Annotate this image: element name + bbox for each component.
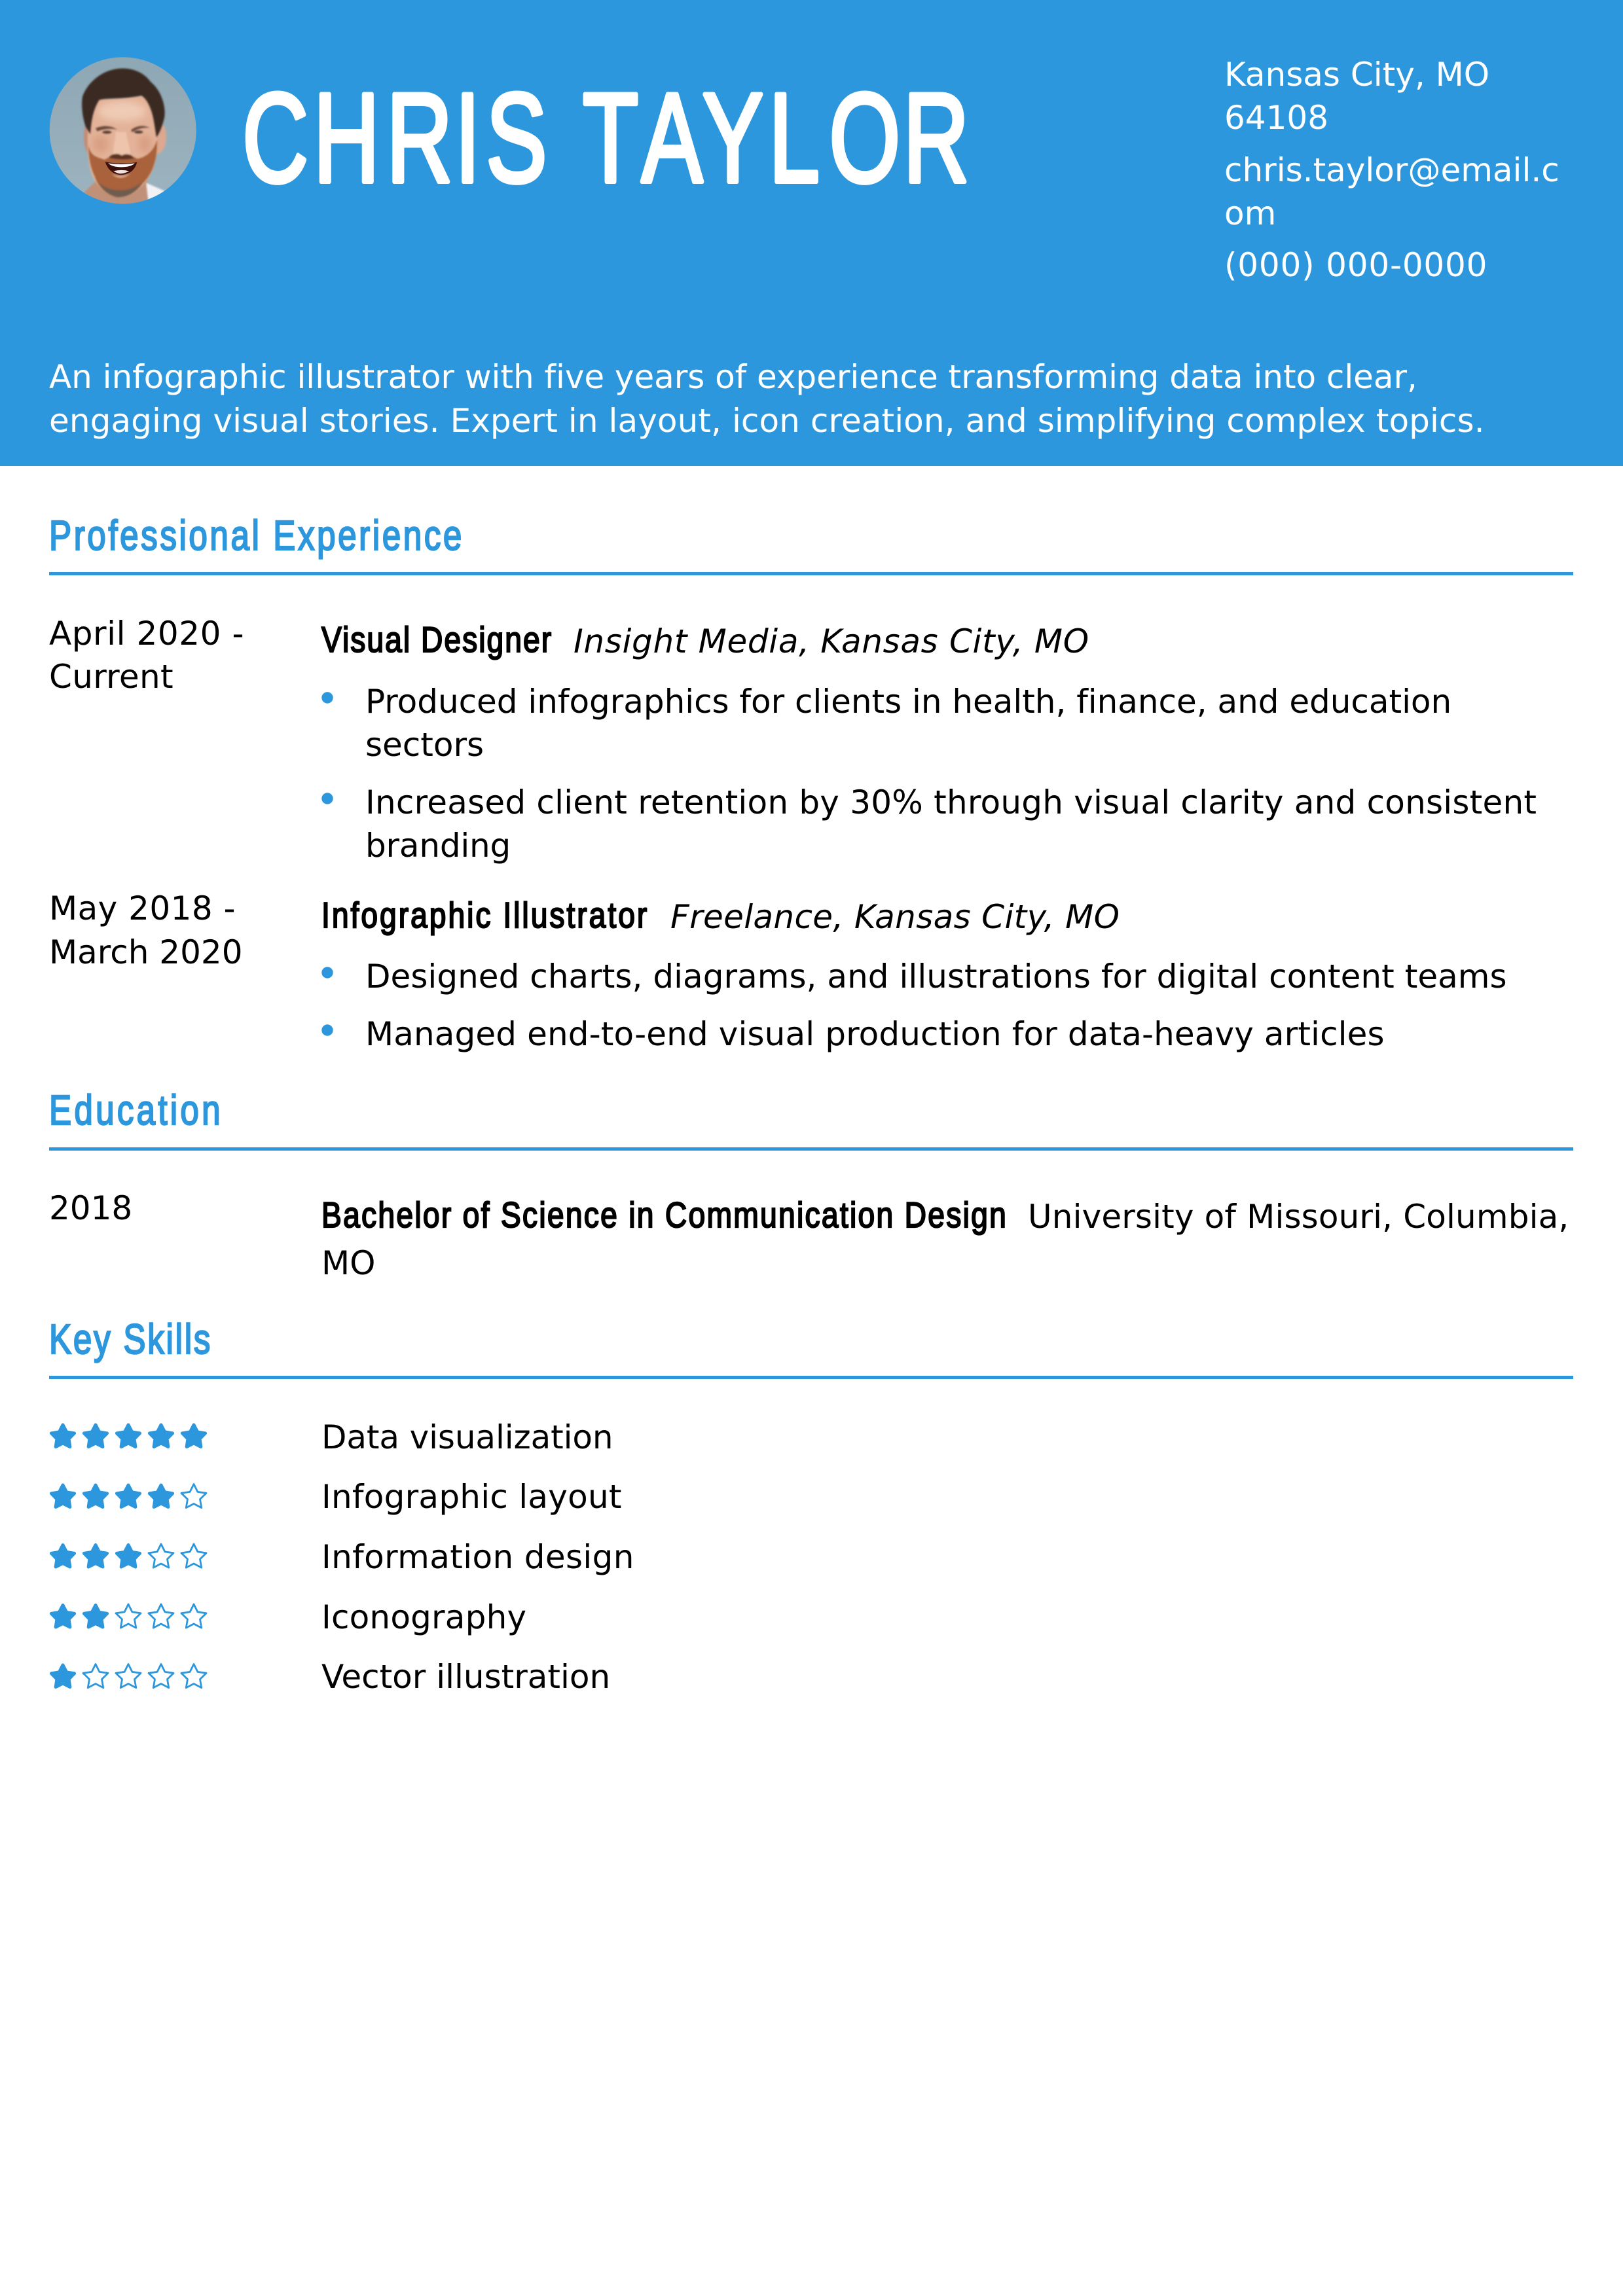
heading rule [49, 572, 1573, 575]
heading: key skills: Key Skills [49, 1317, 210, 1363]
heading rule [49, 1147, 1573, 1151]
skill row: iconography [51, 1598, 526, 1636]
date end: March 2020 [49, 933, 243, 971]
bullet text: Designed charts, diagrams, and illustrations for digital content teams [365, 958, 1507, 996]
address: Kansas City, MO [1224, 56, 1489, 94]
skill name: Information design [321, 1538, 634, 1576]
bullet text wrap: sectors [365, 726, 484, 764]
skill row: vector illustration [51, 1658, 610, 1696]
skill name: Data visualization [321, 1418, 613, 1456]
bullet dot [321, 1024, 333, 1036]
bullet text: Produced infographics for clients in health, finance, and education [365, 683, 1451, 721]
date end: Current [49, 658, 173, 696]
bullet dot [321, 967, 333, 978]
section: education [49, 1088, 1573, 1282]
skill name: Infographic layout [321, 1478, 622, 1516]
bullet text: Increased client retention by 30% through visual clarity and consistent [365, 783, 1537, 821]
bullet dot [321, 692, 333, 704]
skill row: infographic layout [51, 1478, 622, 1516]
section: professional experience [49, 513, 1573, 1053]
bullet text: Managed end-to-end visual production for data-heavy articles [365, 1015, 1385, 1053]
phone: (000) 000-0000 [1224, 246, 1487, 284]
skill row: data visualization [51, 1418, 613, 1456]
bullet dot [321, 793, 333, 804]
job 1 dates [49, 615, 244, 696]
heading: professional experience: Professional Experience [49, 513, 462, 559]
skill row: information design [51, 1538, 634, 1576]
skill name: Vector illustration [321, 1658, 610, 1696]
title: name: CHRIS TAYLOR [242, 67, 969, 209]
rating stars: 1 of 5 [51, 1664, 206, 1688]
header panel [0, 0, 1623, 466]
degree title: Bachelor of Science in Communication Design [321, 1194, 1006, 1235]
education year: 2018 [49, 1189, 132, 1227]
rating stars: 5 of 5 [51, 1425, 206, 1446]
job 1 employer: Insight Media, Kansas City, MO [574, 622, 1089, 660]
date start: May 2018 - [49, 889, 236, 927]
rating stars: 2 of 5 [51, 1604, 206, 1628]
header background [0, 0, 1623, 466]
job 1 bullets [321, 683, 1537, 865]
skill name: Iconography [321, 1598, 526, 1636]
email: chris.taylor@email.c [1224, 151, 1559, 189]
contact details [1224, 56, 1559, 284]
rating stars: 3 of 5 [51, 1544, 206, 1568]
bullet text wrap: branding [365, 827, 511, 865]
job 1 title: Visual Designer [321, 619, 551, 660]
section: key skills [49, 1317, 1573, 1696]
job 2 title: Infographic Illustrator [321, 895, 647, 935]
job 2 dates [49, 889, 243, 971]
school: University of Missouri, Columbia, [1028, 1198, 1569, 1236]
email wrap: om [1224, 194, 1276, 232]
job 2 employer: Freelance, Kansas City, MO [670, 898, 1120, 936]
postal code: 64108 [1224, 99, 1328, 137]
summary line 2: engaging visual stories. Expert in layout, icon creation, and simplifying complex topics. [49, 402, 1485, 440]
heading: education: Education [49, 1088, 221, 1134]
heading rule [49, 1376, 1573, 1379]
job 2 bullets [321, 958, 1507, 1053]
rating stars: 4 of 5 [51, 1484, 206, 1508]
summary line 1: An infographic illustrator with five years of experience transforming data into clear, [49, 358, 1417, 396]
date start: April 2020 - [49, 615, 244, 653]
school wrap: MO [321, 1244, 376, 1282]
icon: portrait photo [46, 54, 198, 207]
summary text [49, 358, 1485, 440]
